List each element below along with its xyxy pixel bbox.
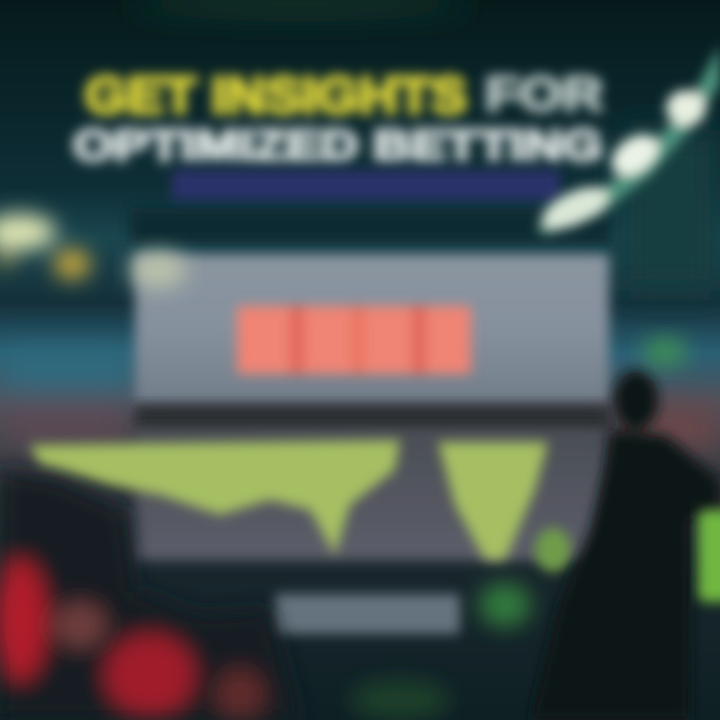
main screen panel (130, 252, 609, 402)
rising arrow (535, 45, 720, 238)
red score display (237, 306, 471, 374)
subtitle bar (172, 170, 560, 200)
title line: optimized betting: OPTIMIZED BETTING (73, 121, 603, 170)
dark divider bar (135, 406, 610, 430)
foreground crowd (0, 470, 531, 720)
green dot (535, 528, 571, 572)
lower caption box (275, 594, 460, 634)
left stadium lights (0, 214, 90, 279)
stadium lights and haze (0, 0, 720, 450)
player silhouette (530, 370, 720, 720)
title word: for: FOR (485, 68, 603, 121)
green map shapes (30, 440, 548, 560)
title (73, 67, 603, 170)
dark band above screen (130, 208, 610, 244)
green glow beside silhouette (698, 510, 720, 602)
lower screen panel (30, 430, 605, 572)
title line: get insights: GET INSIGHTS (85, 67, 467, 125)
panel highlight (130, 252, 186, 288)
green glow above shoulder (643, 338, 687, 366)
